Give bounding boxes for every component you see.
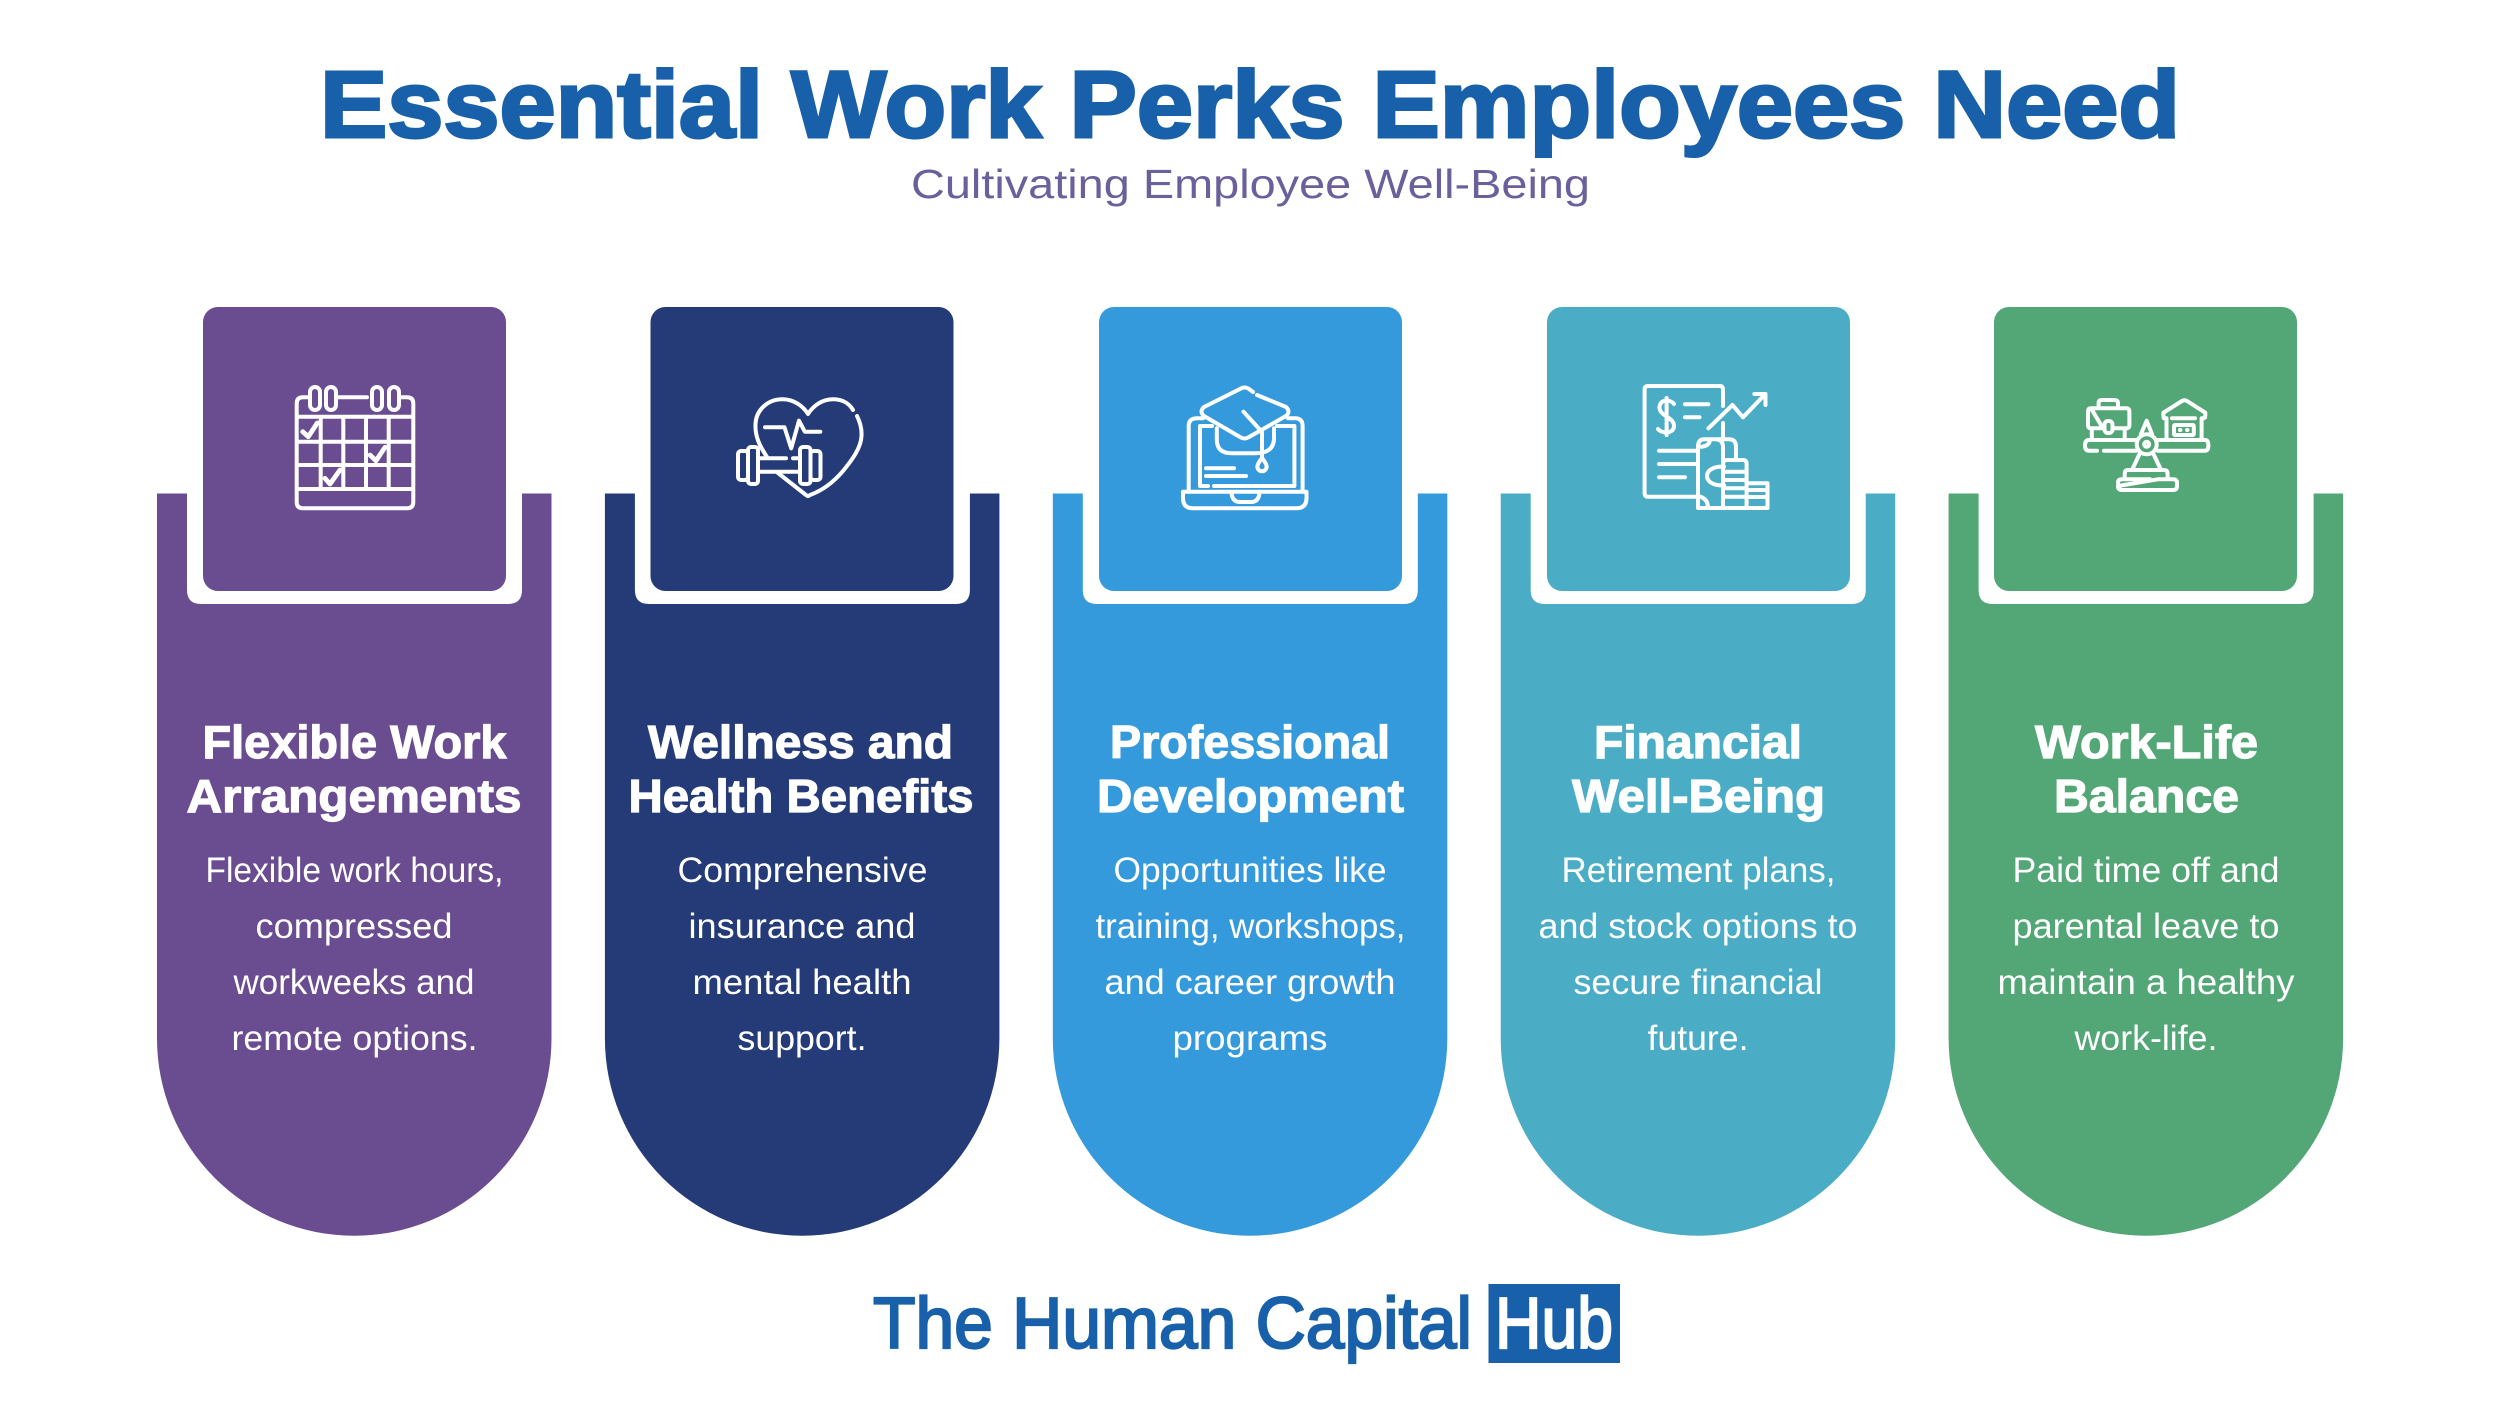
heading: Balance bbox=[2054, 770, 2239, 822]
description: insurance and bbox=[688, 907, 916, 946]
description: Comprehensive bbox=[678, 851, 928, 890]
icon tile bbox=[1547, 307, 1850, 591]
card shape bbox=[1949, 494, 2343, 1236]
description: Paid time off and bbox=[2012, 851, 2280, 890]
description: support. bbox=[738, 1019, 866, 1058]
heading: Financial bbox=[1594, 716, 1802, 768]
description bbox=[1096, 851, 1406, 1058]
description: maintain a healthy bbox=[1998, 963, 2295, 1002]
heading bbox=[628, 716, 974, 822]
panel: work-life balance bbox=[1949, 307, 2343, 1236]
panel: wellness and health benefits bbox=[605, 307, 999, 1236]
description: work-life. bbox=[2073, 1019, 2218, 1058]
description bbox=[206, 851, 504, 1058]
logo wordmark: The Human Capital bbox=[873, 1284, 1472, 1364]
card shape bbox=[157, 494, 552, 1236]
description: compressed bbox=[256, 907, 452, 946]
panel: professional development bbox=[1053, 307, 1447, 1236]
heading: Professional bbox=[1110, 716, 1390, 768]
heading: Health Benefits bbox=[628, 770, 974, 822]
description: training, workshops, bbox=[1096, 907, 1406, 946]
card shape bbox=[1053, 494, 1447, 1236]
description: future. bbox=[1648, 1019, 1748, 1058]
description: Retirement plans, bbox=[1562, 851, 1836, 890]
description: mental health bbox=[692, 963, 912, 1002]
title: Essential Work Perks Employees Need bbox=[320, 52, 2180, 158]
logo box text: Hub bbox=[1495, 1284, 1613, 1364]
heading: Well-Being bbox=[1572, 770, 1825, 822]
description: and stock options to bbox=[1538, 907, 1858, 946]
description bbox=[1998, 851, 2295, 1058]
heading: Flexible Work bbox=[202, 716, 507, 768]
icon: work-life scale bbox=[2085, 400, 2208, 490]
icon: financial document and coins bbox=[1645, 386, 1768, 508]
heading bbox=[1572, 716, 1825, 822]
panel: flexible work arrangements bbox=[157, 307, 552, 1236]
description: parental leave to bbox=[2012, 907, 2280, 946]
icon: heart with dumbbell bbox=[738, 399, 862, 496]
heading bbox=[1097, 716, 1404, 822]
logo: The Human Capital Hub bbox=[873, 1284, 1620, 1364]
description bbox=[1538, 851, 1858, 1058]
heading bbox=[186, 716, 522, 822]
panel: financial well-being bbox=[1501, 307, 1895, 1236]
heading bbox=[2035, 716, 2258, 822]
description: Opportunities like bbox=[1114, 851, 1386, 890]
icon tile bbox=[1994, 307, 2297, 591]
description bbox=[678, 851, 928, 1058]
description: secure financial bbox=[1574, 963, 1822, 1002]
heading: Development bbox=[1097, 770, 1404, 822]
card shape bbox=[605, 494, 999, 1236]
subtitle: Cultivating Employee Well-Being bbox=[911, 161, 1590, 207]
logo box bbox=[1488, 1284, 1620, 1363]
description: remote options. bbox=[232, 1019, 478, 1058]
description: programs bbox=[1172, 1019, 1328, 1058]
icon: graduation cap on laptop bbox=[1183, 388, 1306, 508]
description: workweeks and bbox=[233, 963, 474, 1002]
heading: Arrangements bbox=[186, 770, 522, 822]
icon tile bbox=[1099, 307, 1402, 591]
heading: Wellness and bbox=[648, 716, 953, 768]
icon tile bbox=[650, 307, 954, 591]
description: and career growth bbox=[1104, 963, 1396, 1002]
card shape bbox=[1501, 494, 1895, 1236]
icon: calendar bbox=[297, 387, 413, 508]
description: Flexible work hours, bbox=[206, 851, 504, 890]
icon tile bbox=[203, 307, 506, 591]
heading: Work-Life bbox=[2035, 716, 2258, 768]
